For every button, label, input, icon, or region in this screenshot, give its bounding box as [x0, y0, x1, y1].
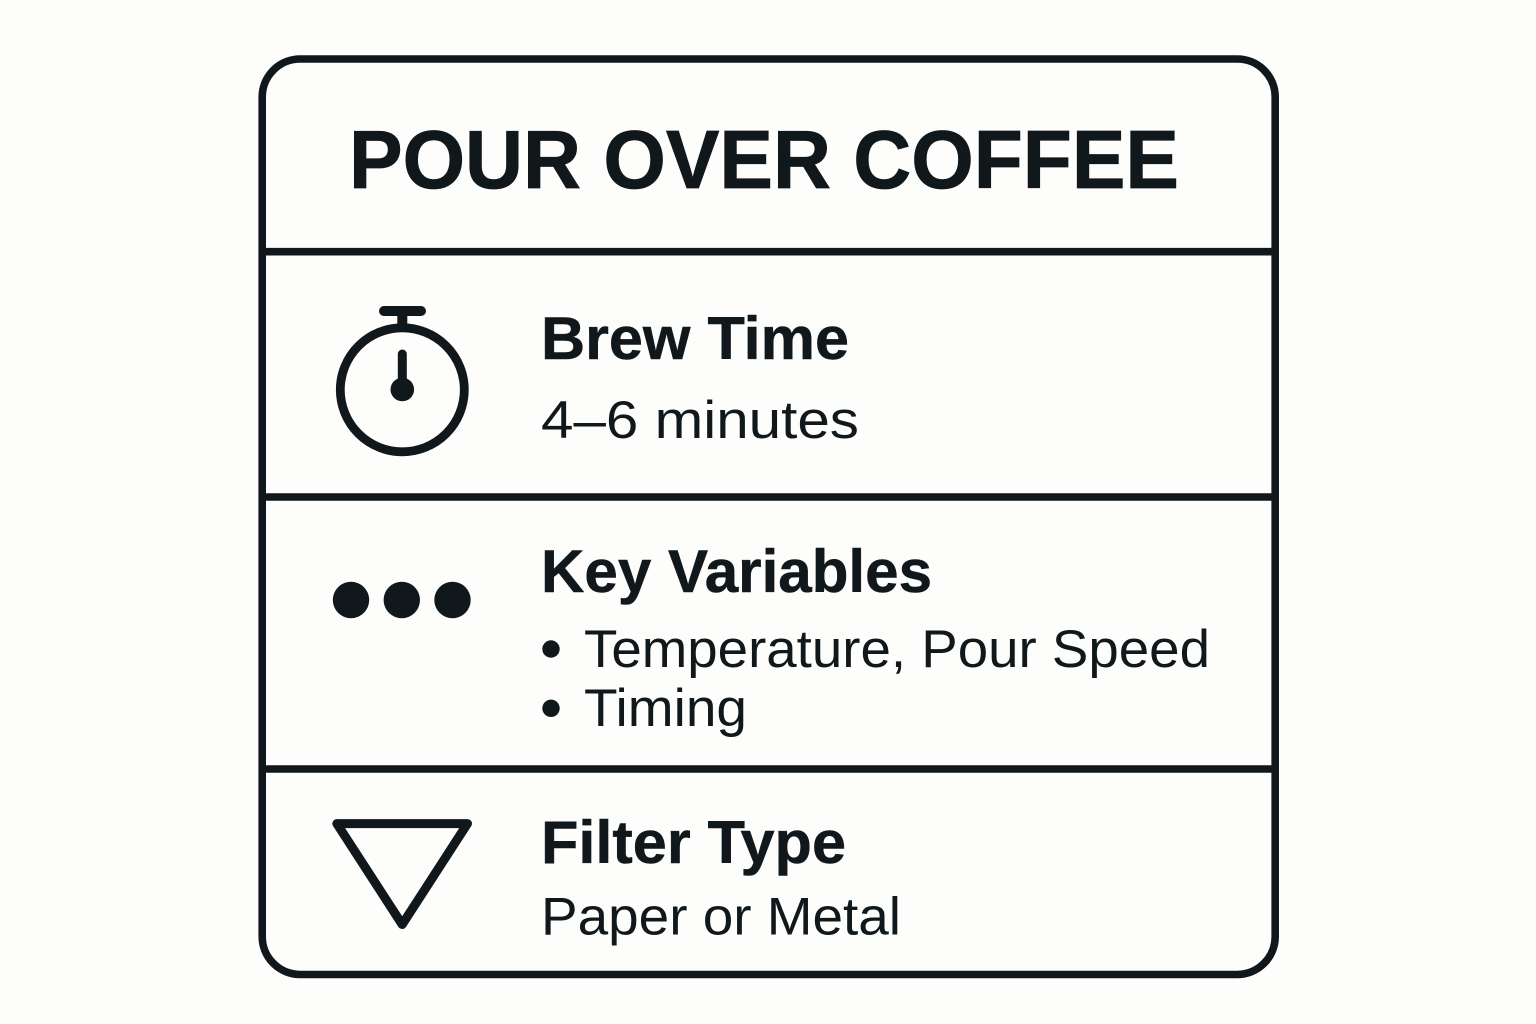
heading: key variables: Key Variables	[541, 538, 932, 605]
text: brew time value: 4–6 minutes	[541, 391, 859, 450]
icon: stopwatch	[340, 311, 464, 452]
heading: brew time: Brew Time	[541, 305, 849, 372]
text: filter type value: Paper or Metal	[541, 888, 901, 946]
icon: three dots	[333, 582, 471, 618]
list: key variables: Timing	[584, 679, 747, 738]
panel: card	[262, 59, 1275, 974]
list: key variables	[542, 620, 1210, 738]
list: key variables: Temperature, Pour Speed	[584, 620, 1210, 679]
icon: filter triangle	[337, 824, 468, 924]
heading: filter type: Filter Type	[541, 809, 846, 876]
title: POUR OVER COFFEE	[349, 113, 1179, 206]
